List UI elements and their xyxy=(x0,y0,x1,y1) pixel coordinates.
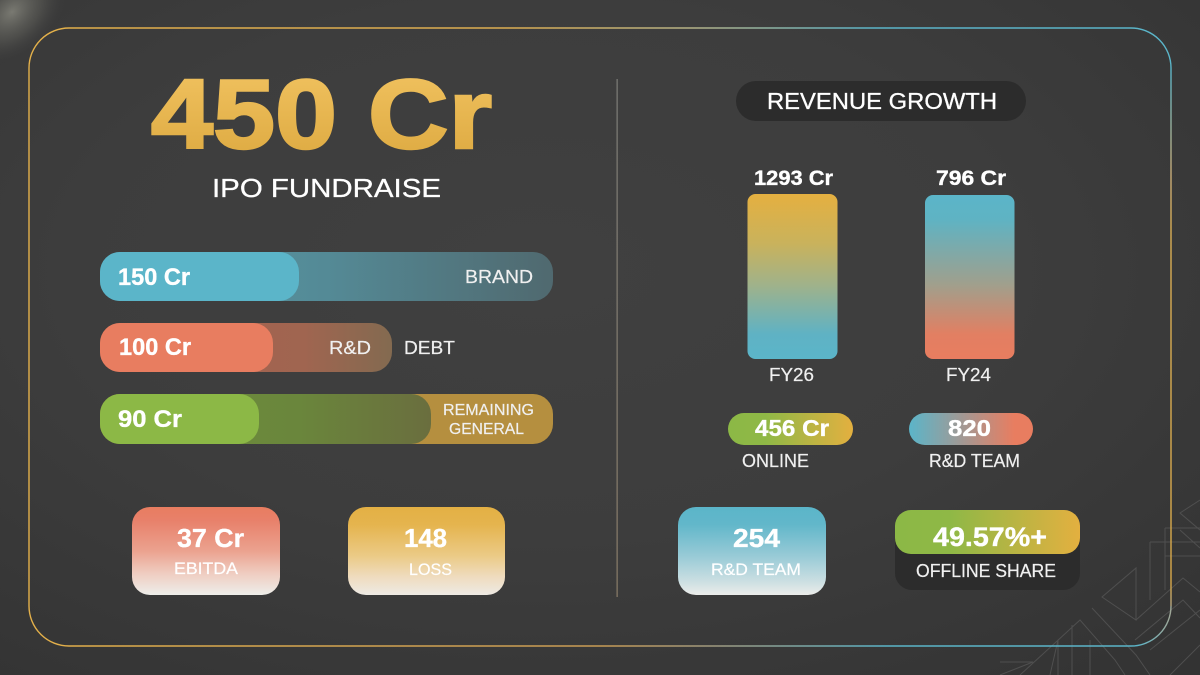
column: FY24 xyxy=(925,167,1014,385)
column: FY24: 796 Cr xyxy=(936,167,1006,190)
pill stat: R&D team: 820 xyxy=(948,415,991,441)
stat card: EBITDA: EBITDA xyxy=(174,559,239,578)
column: FY26: 1293 Cr xyxy=(754,167,833,190)
bar: R&D 100 Cr: DEBT xyxy=(404,338,455,358)
stat card: loss: LOSS xyxy=(409,560,452,579)
heading pill xyxy=(736,81,1026,121)
bar: R&D 100 Cr: 100 Cr xyxy=(119,334,191,361)
stat card: R&D team: R&D TEAM xyxy=(711,560,801,579)
pill stat: online: ONLINE xyxy=(742,451,809,471)
bar: remaining general 90 Cr: 90 Cr xyxy=(118,406,182,433)
stat card: R&D team: 254 xyxy=(733,523,781,553)
pill stat: R&D team: R&D TEAM xyxy=(929,451,1020,471)
bar: R&D 100 Cr xyxy=(100,323,455,372)
stat card: EBITDA: 37 Cr xyxy=(177,523,244,553)
heading pill: REVENUE GROWTH xyxy=(767,88,997,114)
stat card: offline share xyxy=(895,510,1080,590)
stat card: offline share: OFFLINE SHARE xyxy=(916,561,1056,581)
pill stat: R&D team xyxy=(909,413,1033,471)
column: FY26 xyxy=(748,167,838,385)
bar: brand 150 Cr xyxy=(100,252,553,301)
bar: brand 150 Cr: 150 Cr xyxy=(118,264,190,291)
divider xyxy=(617,79,618,597)
stat card: offline share: 49.57%+ xyxy=(933,522,1047,552)
bar: remaining general 90 Cr xyxy=(100,394,553,444)
bar: brand 150 Cr: BRAND xyxy=(465,267,533,287)
stat card: loss: 148 xyxy=(404,523,447,553)
column: FY24: FY24 xyxy=(946,365,991,385)
bar: remaining general 90 Cr: REMAINING xyxy=(443,402,534,419)
pill stat: online xyxy=(728,413,853,471)
stat card: R&D team xyxy=(678,507,826,595)
right panel: revenue growth xyxy=(678,81,1080,595)
headline caption: IPO FUNDRAISE xyxy=(212,173,441,203)
bar: R&D 100 Cr: R&D xyxy=(329,338,371,358)
left panel: IPO fundraise xyxy=(100,59,553,595)
headline figure: 450 Cr xyxy=(151,59,492,169)
pill stat: online: 456 Cr xyxy=(755,415,829,441)
stat card: loss xyxy=(348,507,505,595)
bar: remaining general 90 Cr: GENERAL xyxy=(449,421,524,438)
column: FY26: FY26 xyxy=(769,365,814,385)
stat card: EBITDA xyxy=(132,507,280,595)
